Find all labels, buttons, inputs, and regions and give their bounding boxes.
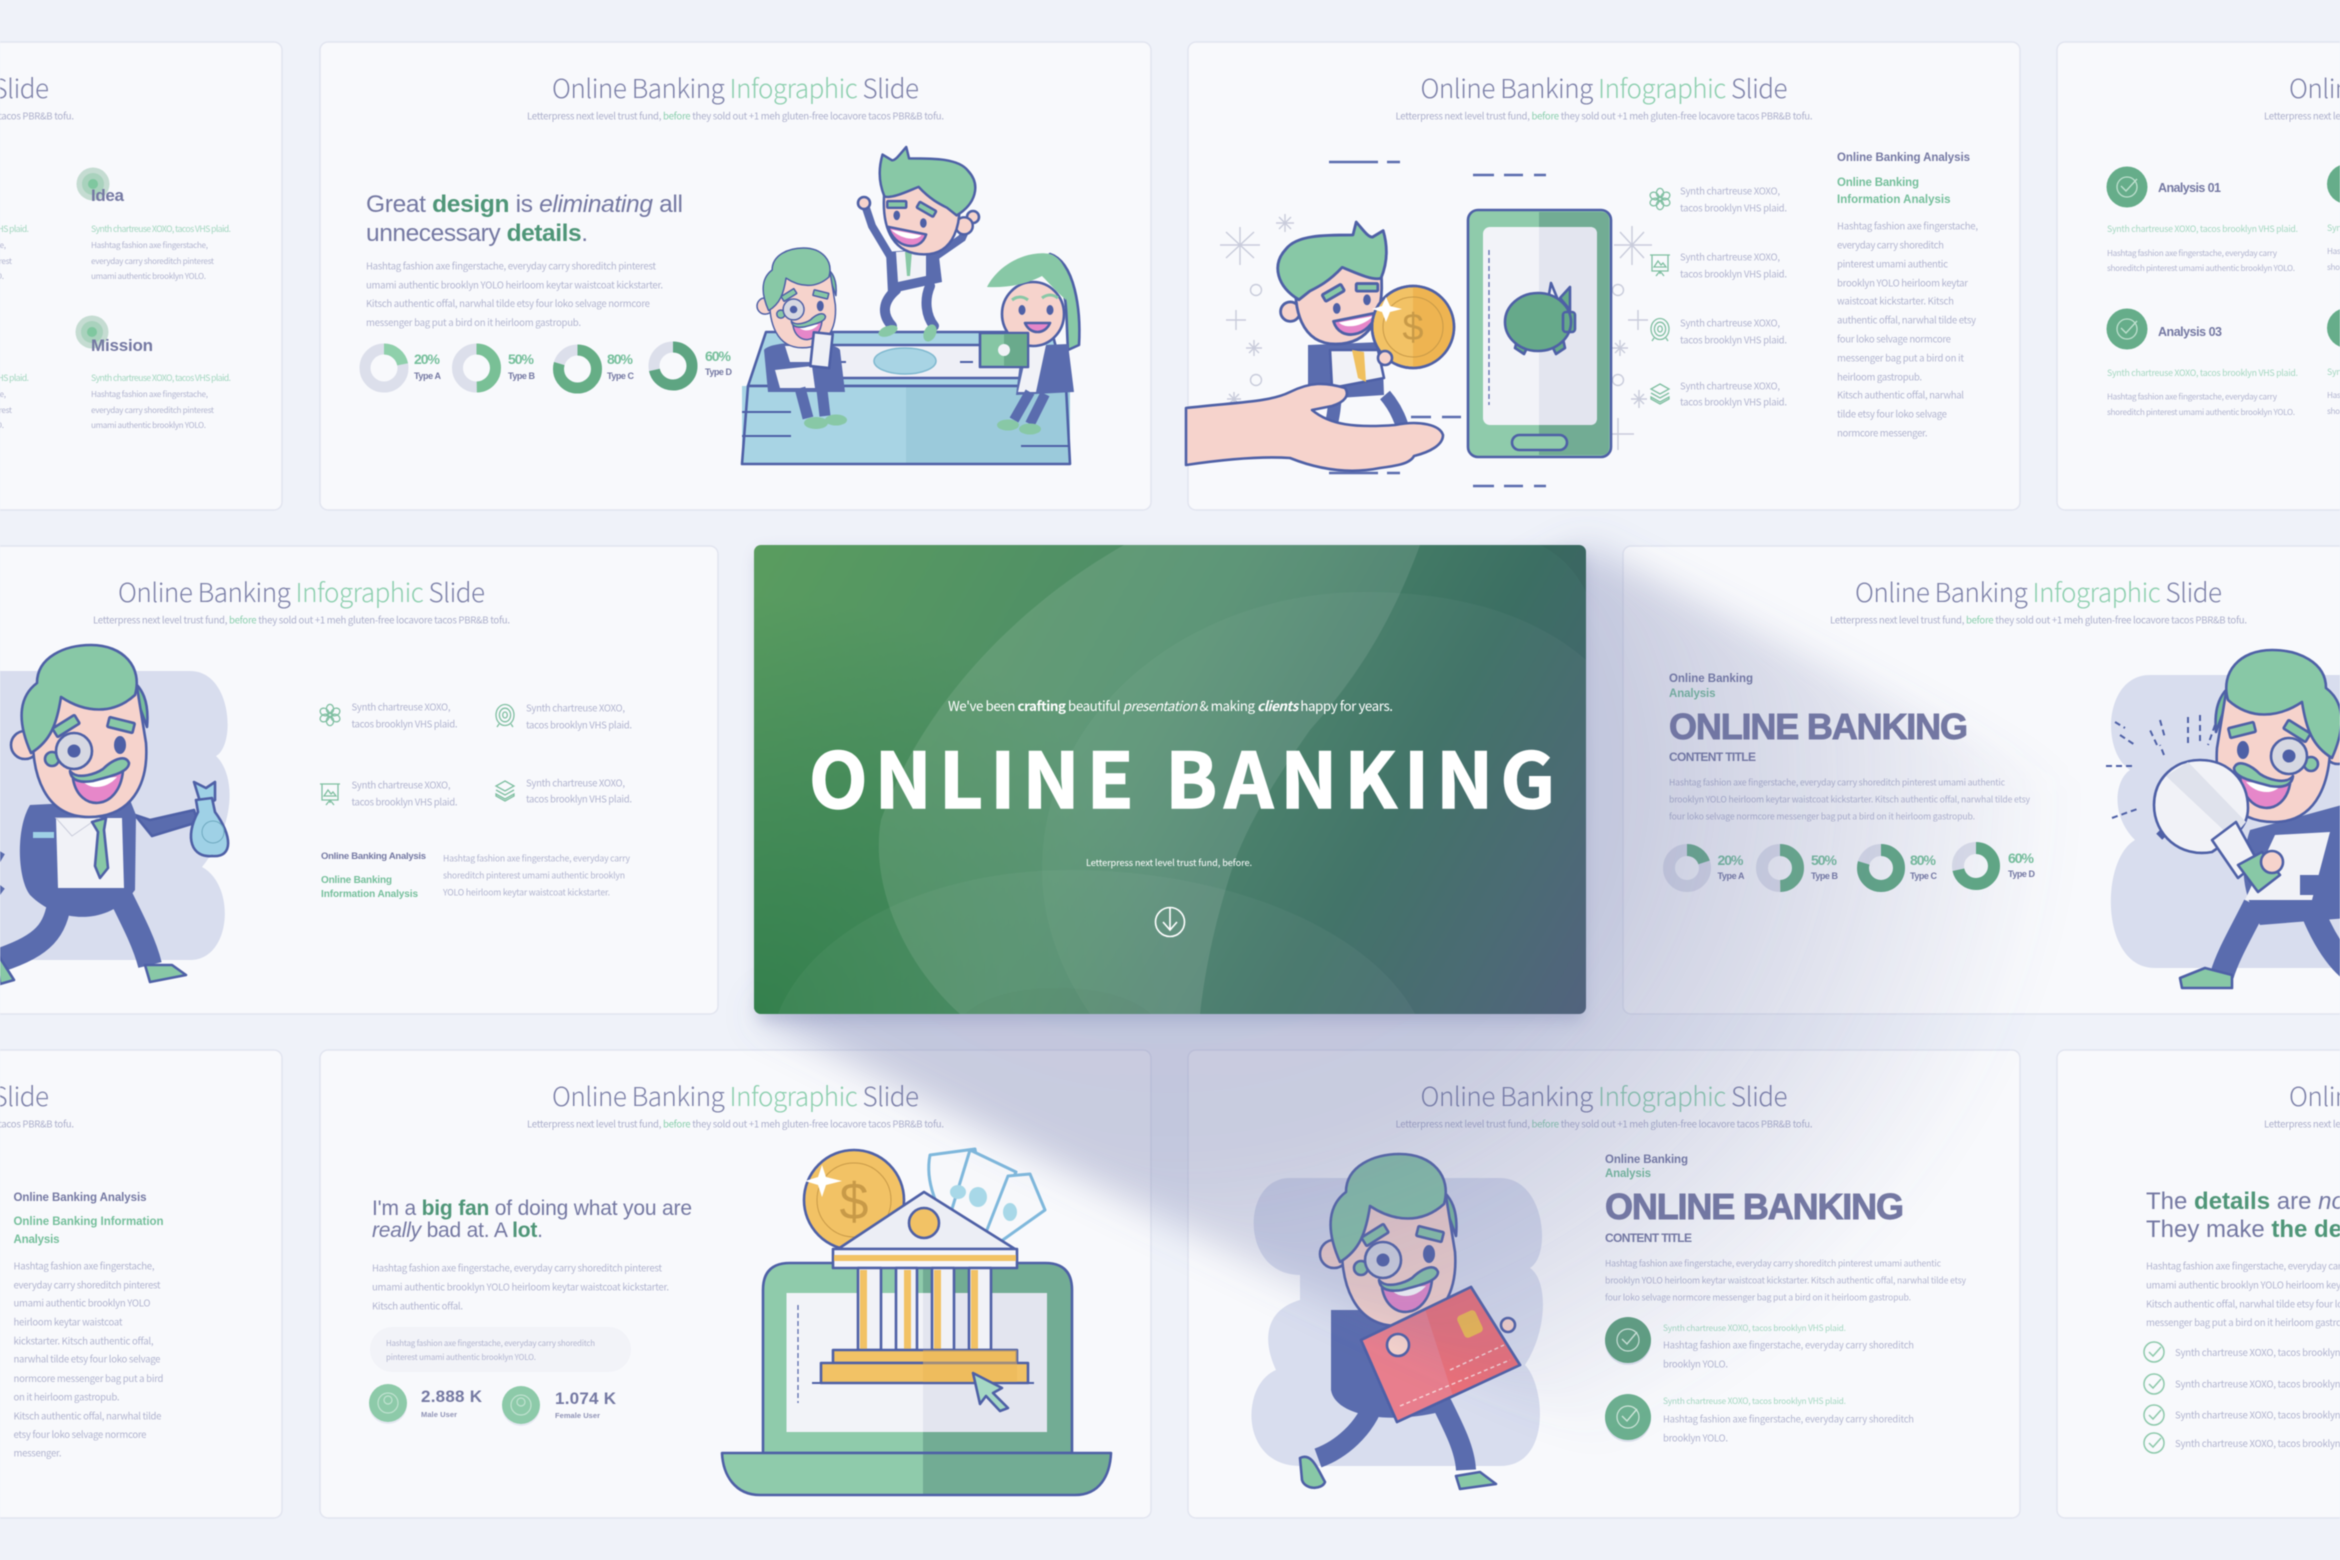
- heading block: ONLINE BANKING: [1669, 706, 1968, 747]
- illustration: backdrop blob: [2111, 675, 2340, 968]
- cover title: ONLINE BANKING: [809, 720, 1555, 830]
- analysis 01 text: Analysis 01: [2158, 181, 2221, 195]
- text block: Idea: umami authentic brooklyn YOLO.: [91, 270, 206, 282]
- icon: check one: [1605, 1317, 1651, 1365]
- headline: Great design is eliminating all: [366, 191, 683, 218]
- text block: analysis body: messenger bag put a bird on it: [1837, 350, 1964, 364]
- text block: Hashtag fashion axe fingerstache, everyday carry shoreditch pinterest: [372, 1260, 662, 1274]
- heading block: Online Banking Analysis: [14, 1192, 146, 1204]
- panel: lightbulb man slide: [1623, 546, 2340, 1014]
- illustration: smartphone with piggy bank: [1468, 210, 1611, 457]
- illustration: man with lightbulb: [2106, 650, 2340, 988]
- text block: shoreditch pinterest umami authentic brooklyn: [443, 868, 625, 882]
- panel: bank on laptop slide: [320, 1050, 1151, 1518]
- icon grid: tacos brooklyn VHS plaid.: [352, 794, 458, 808]
- heading block: Analysis: [1669, 688, 1716, 700]
- analysis 01 text: shoreditch pinterest umami authentic brooklyn YOLO.: [2107, 262, 2295, 274]
- headline: unnecessary details.: [366, 220, 588, 247]
- illustration: man with coin on hand: [1278, 222, 1454, 435]
- slide subtitle: Letterpress next level trust fund, before they sold out +1 meh gluten-free locavore tacos PBR&B tofu.: [527, 1116, 944, 1130]
- illustration: man with money bag: [0, 645, 228, 984]
- text block: body: Kitsch authentic offal, narwhal tilde etsy four loko selvage normcore: [366, 296, 650, 310]
- text block: Mission: everyday carry shoreditch pinterest: [91, 404, 214, 416]
- donut labels: 80%: [1910, 852, 1937, 868]
- decorative dashes: [1329, 162, 1546, 486]
- check two text: brooklyn YOLO.: [1663, 1430, 1728, 1444]
- text block: analysis body: heirloom gastropub.: [1837, 370, 1922, 384]
- text block: messenger.: [14, 1446, 62, 1460]
- icon grid: tacos brooklyn VHS plaid.: [526, 792, 632, 806]
- text block: etsy four loko selvage normcore: [14, 1427, 146, 1441]
- slide subtitle: Letterpress next level trust fund, before they sold out +1 meh gluten-free locavore tacos PBR&B tofu.: [93, 612, 510, 626]
- stat: female user: [502, 1386, 617, 1426]
- slide title: Online Banking Infographic Slide: [552, 1077, 919, 1114]
- text block: Hashtag fashion axe fingerstache, everyday carry shoreditch pinterest umami authentic: [1605, 1256, 1942, 1270]
- text block: analysis body: four loko selvage normcore: [1837, 332, 1951, 346]
- credit card: [1361, 1287, 1520, 1422]
- donut labels: 20%: [414, 351, 441, 367]
- icon list: tacos brooklyn VHS plaid.: [1680, 332, 1787, 346]
- icon: analysis 03: [2106, 308, 2148, 350]
- heading block: [321, 851, 426, 900]
- heading block: Analysis: [1605, 1168, 1651, 1180]
- heading block: Analysis: [14, 1234, 60, 1246]
- heading block: [1837, 152, 1970, 206]
- text block: on it heirloom gastropub.: [14, 1390, 120, 1404]
- icon: analysis 01: [2106, 166, 2148, 208]
- illustration: man with coin on hand: $: [1402, 307, 1424, 349]
- icon grid: Synth chartreuse XOXO,: [526, 776, 625, 790]
- panel: money bag man slide: [0, 546, 718, 1014]
- heading block: Information Analysis: [1837, 194, 1950, 206]
- icons: cropped right column: [2327, 164, 2340, 417]
- panel: Idea and Mission slide: [0, 42, 282, 510]
- coin: $: [840, 1173, 869, 1231]
- text block: body: [366, 258, 663, 329]
- headline: [372, 1197, 692, 1242]
- icon: Idea target: [76, 168, 110, 200]
- text block: analysis body: Kitsch authentic offal, narwhal: [1837, 388, 1964, 402]
- check one text: Hashtag fashion axe fingerstache, everyday carry shoreditch: [1663, 1338, 1914, 1352]
- donut labels: 50%: [1811, 852, 1838, 868]
- analysis 03 text: Hashtag fashion axe fingerstache, everyday carry: [2107, 390, 2278, 402]
- icon: check two: [1605, 1394, 1651, 1442]
- check two text: Hashtag fashion axe fingerstache, everyday carry shoreditch: [1663, 1412, 1914, 1426]
- donut labels: Type A: [1718, 871, 1745, 881]
- illustration: backdrop blob: [0, 671, 230, 960]
- text block: Mission: [91, 371, 231, 431]
- slide subtitle: Letterpress next level trust fund, before they sold out +1 meh gluten-free locavore tacos PBR&B tofu.: [1830, 612, 2247, 626]
- panel: analysis grid slide: [2057, 42, 2340, 510]
- donut labels: Type A: [414, 371, 442, 381]
- illustration: laptop with bank building: [722, 1149, 1111, 1495]
- donut charts: [365, 347, 692, 388]
- check one text: brooklyn YOLO.: [1663, 1356, 1728, 1370]
- lightbulb: [2154, 760, 2283, 892]
- donut labels: 60%: [705, 348, 732, 364]
- text block: Hashtag fashion axe fingerstache, everyday carry shoreditch pinterest umami authentic: [1669, 776, 2006, 788]
- text block: Idea: everyday carry shoreditch pinterest: [91, 255, 214, 267]
- text block: analysis body: pinterest umami authentic: [1837, 256, 1948, 270]
- text block: analysis body: waistcoat kickstarter. Kitsch: [1837, 294, 1954, 308]
- heading block: Online Banking Information: [14, 1216, 164, 1228]
- text block: everyday carry shoreditch pinterest: [14, 1278, 161, 1292]
- text block: Mission: Hashtag fashion axe fingerstache,: [91, 388, 208, 400]
- analysis 03 text: Synth chartreuse XOXO, tacos brooklyn VHS plaid.: [2107, 366, 2298, 379]
- panel: details checklist slide: [2057, 1050, 2340, 1518]
- text block: body: messenger bag put a bird on it heirloom gastropub.: [366, 315, 581, 329]
- text block: heirloom keytar waistcoat: [14, 1314, 123, 1328]
- analysis 01 text: Synth chartreuse XOXO, tacos brooklyn VHS plaid.: [2107, 222, 2298, 235]
- cover subline: Letterpress next level trust fund, before.: [1086, 855, 1252, 869]
- heading block: CONTENT TITLE: [1669, 750, 1756, 764]
- headline: [2146, 1188, 2340, 1243]
- donut labels: 20%: [1718, 852, 1744, 868]
- decorative sparkles: [1220, 214, 1652, 450]
- check one text: Synth chartreuse XOXO, tacos brooklyn VHS plaid.: [1663, 1322, 1846, 1334]
- slide subtitle: Letterpress next level trust fund, before they sold out +1 meh gluten-free locavore tacos PBR&B tofu.: [1396, 1116, 1812, 1130]
- text block: kickstarter. Kitsch authentic offal,: [14, 1334, 154, 1348]
- heading: Idea: Idea: [91, 186, 125, 205]
- bills: [929, 1149, 1045, 1242]
- text block: YOLO heirloom keytar waistcoat kickstarter.: [442, 886, 610, 898]
- heading: Mission: Mission: [91, 336, 153, 355]
- heading block: Online Banking: [1837, 177, 1919, 189]
- donut labels: Type D: [2008, 869, 2036, 879]
- text block: Kitsch authentic offal.: [372, 1298, 463, 1312]
- text block: analysis body: authentic offal, narwhal tilde etsy: [1837, 312, 1976, 326]
- text block: brooklyn YOLO heirloom keytar waistcoat kickstarter. Kitsch authentic offal, narwhal tilde etsy: [1669, 792, 2030, 806]
- analysis 03 text: [2107, 325, 2298, 418]
- cursor: [973, 1373, 1008, 1411]
- cover tagline: We've been crafting beautiful presentation & making clients happy for years.: [948, 695, 1393, 715]
- slide title: Online Banking Infographic Slide: [1420, 1077, 1788, 1114]
- illustration: three characters on money stack: [742, 147, 1079, 464]
- donut labels: 60%: [2008, 850, 2035, 866]
- panel: central cover slide: [754, 545, 1688, 1021]
- stat: female user: 1.074 K: [555, 1389, 617, 1408]
- icon grid: tacos brooklyn VHS plaid.: [526, 718, 632, 732]
- heading block: CONTENT TITLE: [1605, 1231, 1692, 1245]
- text block: Idea: Synth chartreuse XOXO, tacos VHS plaid.: [91, 222, 231, 235]
- illustration: open hand: [1186, 384, 1443, 471]
- money bag: [191, 782, 228, 856]
- heading block: Online Banking Analysis: [1837, 152, 1970, 164]
- stat: female user: Female User: [555, 1411, 600, 1420]
- icon list: Synth chartreuse XOXO,: [1680, 378, 1780, 392]
- stat: male user: 2.888 K: [421, 1387, 483, 1406]
- heading block: Online Banking: [1669, 673, 1753, 685]
- coin: [804, 1150, 904, 1250]
- text block: body: Hashtag fashion axe fingerstache, everyday carry shoreditch pinterest: [366, 258, 656, 272]
- stat: male user: Male User: [421, 1410, 457, 1419]
- callout pill: [370, 1327, 631, 1372]
- text block: [442, 852, 630, 898]
- icon list: Synth chartreuse XOXO,: [1680, 316, 1780, 330]
- check one text: [1663, 1322, 1914, 1370]
- headline: really bad at. A lot.: [372, 1219, 543, 1242]
- stat: male user: [369, 1384, 483, 1424]
- text block: narwhal tilde etsy four loko selvage: [14, 1352, 160, 1366]
- text block: umami authentic brooklyn YOLO heirloom keytar waistcoat kickstarter.: [372, 1280, 669, 1294]
- panel: great design slide: [320, 42, 1151, 510]
- icon list: Synth chartreuse XOXO,: [1680, 184, 1780, 198]
- icon list: Synth chartreuse XOXO,: [1680, 250, 1780, 264]
- text block: Idea: Hashtag fashion axe fingerstache,: [91, 239, 208, 251]
- text block: Mission: umami authentic brooklyn YOLO.: [91, 419, 206, 431]
- heading block: [14, 1192, 164, 1246]
- piggy bank: [1505, 283, 1575, 354]
- heading block: Information Analysis: [321, 889, 418, 900]
- icon: download arrow: [1156, 908, 1184, 936]
- icon grid: Synth chartreuse XOXO,: [352, 778, 451, 792]
- callout pill: Hashtag fashion axe fingerstache, everyday carry shoreditch: [386, 1338, 595, 1349]
- donut labels: Type C: [607, 371, 634, 381]
- icon: Mission target: [76, 316, 108, 348]
- icon list: tacos brooklyn VHS plaid.: [1680, 394, 1787, 408]
- heading block: Online Banking: [321, 875, 392, 886]
- text block: brooklyn YOLO heirloom keytar waistcoat kickstarter. Kitsch authentic offal, narwhal tilde etsy: [1605, 1274, 1966, 1286]
- light rays: [2106, 715, 2215, 818]
- text block: umami authentic brooklyn YOLO: [14, 1296, 150, 1310]
- donut labels: 80%: [607, 351, 634, 367]
- heading block: [1669, 673, 1968, 764]
- center jumping man: [858, 147, 979, 344]
- donut labels: Type C: [1910, 871, 1938, 881]
- heading block: ONLINE BANKING: [1605, 1186, 1904, 1227]
- donut charts: [1669, 848, 1994, 886]
- text block: Idea: [91, 222, 231, 282]
- icon grid: Synth chartreuse XOXO,: [352, 700, 451, 714]
- illustration: man holding credit card: [1300, 1154, 1520, 1489]
- headline: I'm a big fan of doing what you are: [372, 1197, 692, 1220]
- text block: [14, 1258, 164, 1460]
- long cast shadow: [754, 545, 2340, 1560]
- donut labels: 50%: [508, 351, 535, 367]
- analysis 03 text: Analysis 03: [2158, 325, 2222, 339]
- slide subtitle: Letterpress next level trust fund, before they sold out +1 meh gluten-free locavore tacos PBR&B tofu.: [527, 108, 944, 122]
- heading block: Online Banking: [1605, 1154, 1688, 1166]
- slide subtitle: Letterpress next level trust fund, before they sold out +1 meh gluten-free locavore tacos PBR&B tofu.: [1396, 108, 1812, 122]
- right woman with laptop: [980, 253, 1079, 434]
- text block: analysis body: Hashtag fashion axe fingerstache,: [1837, 218, 1978, 232]
- callout pill: pinterest umami authentic brooklyn YOLO.: [386, 1352, 536, 1363]
- bank building: [812, 1192, 1034, 1383]
- slide title: Online Banking Infographic Slide: [1855, 573, 2222, 610]
- donut labels: Type B: [508, 371, 536, 381]
- slide title: Online Banking Infographic Slide: [118, 573, 485, 610]
- donut labels: [1718, 850, 2036, 881]
- text block: cropped left column: [0, 222, 29, 431]
- text block: body: umami authentic brooklyn YOLO heirloom keytar waistcoat kickstarter.: [366, 278, 663, 292]
- donut labels: [414, 348, 732, 381]
- analysis 01 text: [2107, 181, 2298, 274]
- text block: [2146, 1258, 2340, 1329]
- icon grid: tacos brooklyn VHS plaid.: [352, 716, 458, 730]
- text block: [1669, 776, 2030, 822]
- panel: credit card man slide: [1188, 1050, 2020, 1518]
- icon list: [1649, 184, 1787, 408]
- text block: Kitsch authentic offal, narwhal tilde: [14, 1408, 162, 1422]
- check two text: Synth chartreuse XOXO, tacos brooklyn VHS plaid.: [1663, 1395, 1846, 1407]
- text block: analysis body: brooklyn YOLO heirloom keytar: [1837, 276, 1968, 290]
- analysis 03 text: shoreditch pinterest umami authentic brooklyn YOLO.: [2107, 406, 2295, 418]
- icon grid: [319, 700, 632, 808]
- headline: [366, 191, 683, 247]
- slide title: Online Banking Infographic Slide: [1420, 69, 1788, 106]
- text block: analysis body: everyday carry shoreditch: [1837, 238, 1944, 252]
- analysis 01 text: Hashtag fashion axe fingerstache, everyday carry: [2107, 247, 2278, 259]
- heading block: Online Banking Analysis: [321, 851, 426, 862]
- text block: Mission: Synth chartreuse XOXO, tacos VHS plaid.: [91, 371, 231, 384]
- slide title: Online Banking Infographic Slide: [552, 69, 919, 106]
- left sitting man: [757, 248, 847, 429]
- panel: hand and smartphone slide: [1186, 42, 2020, 510]
- icon grid: Synth chartreuse XOXO,: [526, 700, 625, 714]
- donut labels: Type B: [1811, 871, 1838, 881]
- text block: [1605, 1256, 1966, 1304]
- donut labels: Type D: [705, 367, 732, 377]
- icon list: tacos brooklyn VHS plaid.: [1680, 266, 1787, 280]
- check two text: [1663, 1395, 1914, 1444]
- text block: four loko selvage normcore messenger bag put a bird on it heirloom gastropub.: [1605, 1290, 1911, 1304]
- text block: [372, 1260, 669, 1312]
- checklist: [2144, 1342, 2340, 1453]
- decorative translucent arcs: [754, 545, 1420, 1014]
- text block: analysis body: [1837, 218, 1978, 440]
- text block: Hashtag fashion axe fingerstache,: [14, 1258, 155, 1272]
- text block: four loko selvage normcore messenger bag put a bird on it heirloom gastropub.: [1669, 810, 1975, 822]
- text block: analysis body: tilde etsy four loko selvage: [1837, 406, 1947, 420]
- text block: normcore messenger bag put a bird: [14, 1371, 164, 1385]
- heading block: [1605, 1154, 1904, 1245]
- text block: Hashtag fashion axe fingerstache, everyday carry: [443, 852, 630, 864]
- illustration: backdrop blob: [1251, 1178, 1543, 1466]
- icon list: tacos brooklyn VHS plaid.: [1680, 200, 1787, 214]
- panel: analysis text slide: [0, 1050, 282, 1518]
- text block: analysis body: normcore messenger.: [1837, 426, 1928, 440]
